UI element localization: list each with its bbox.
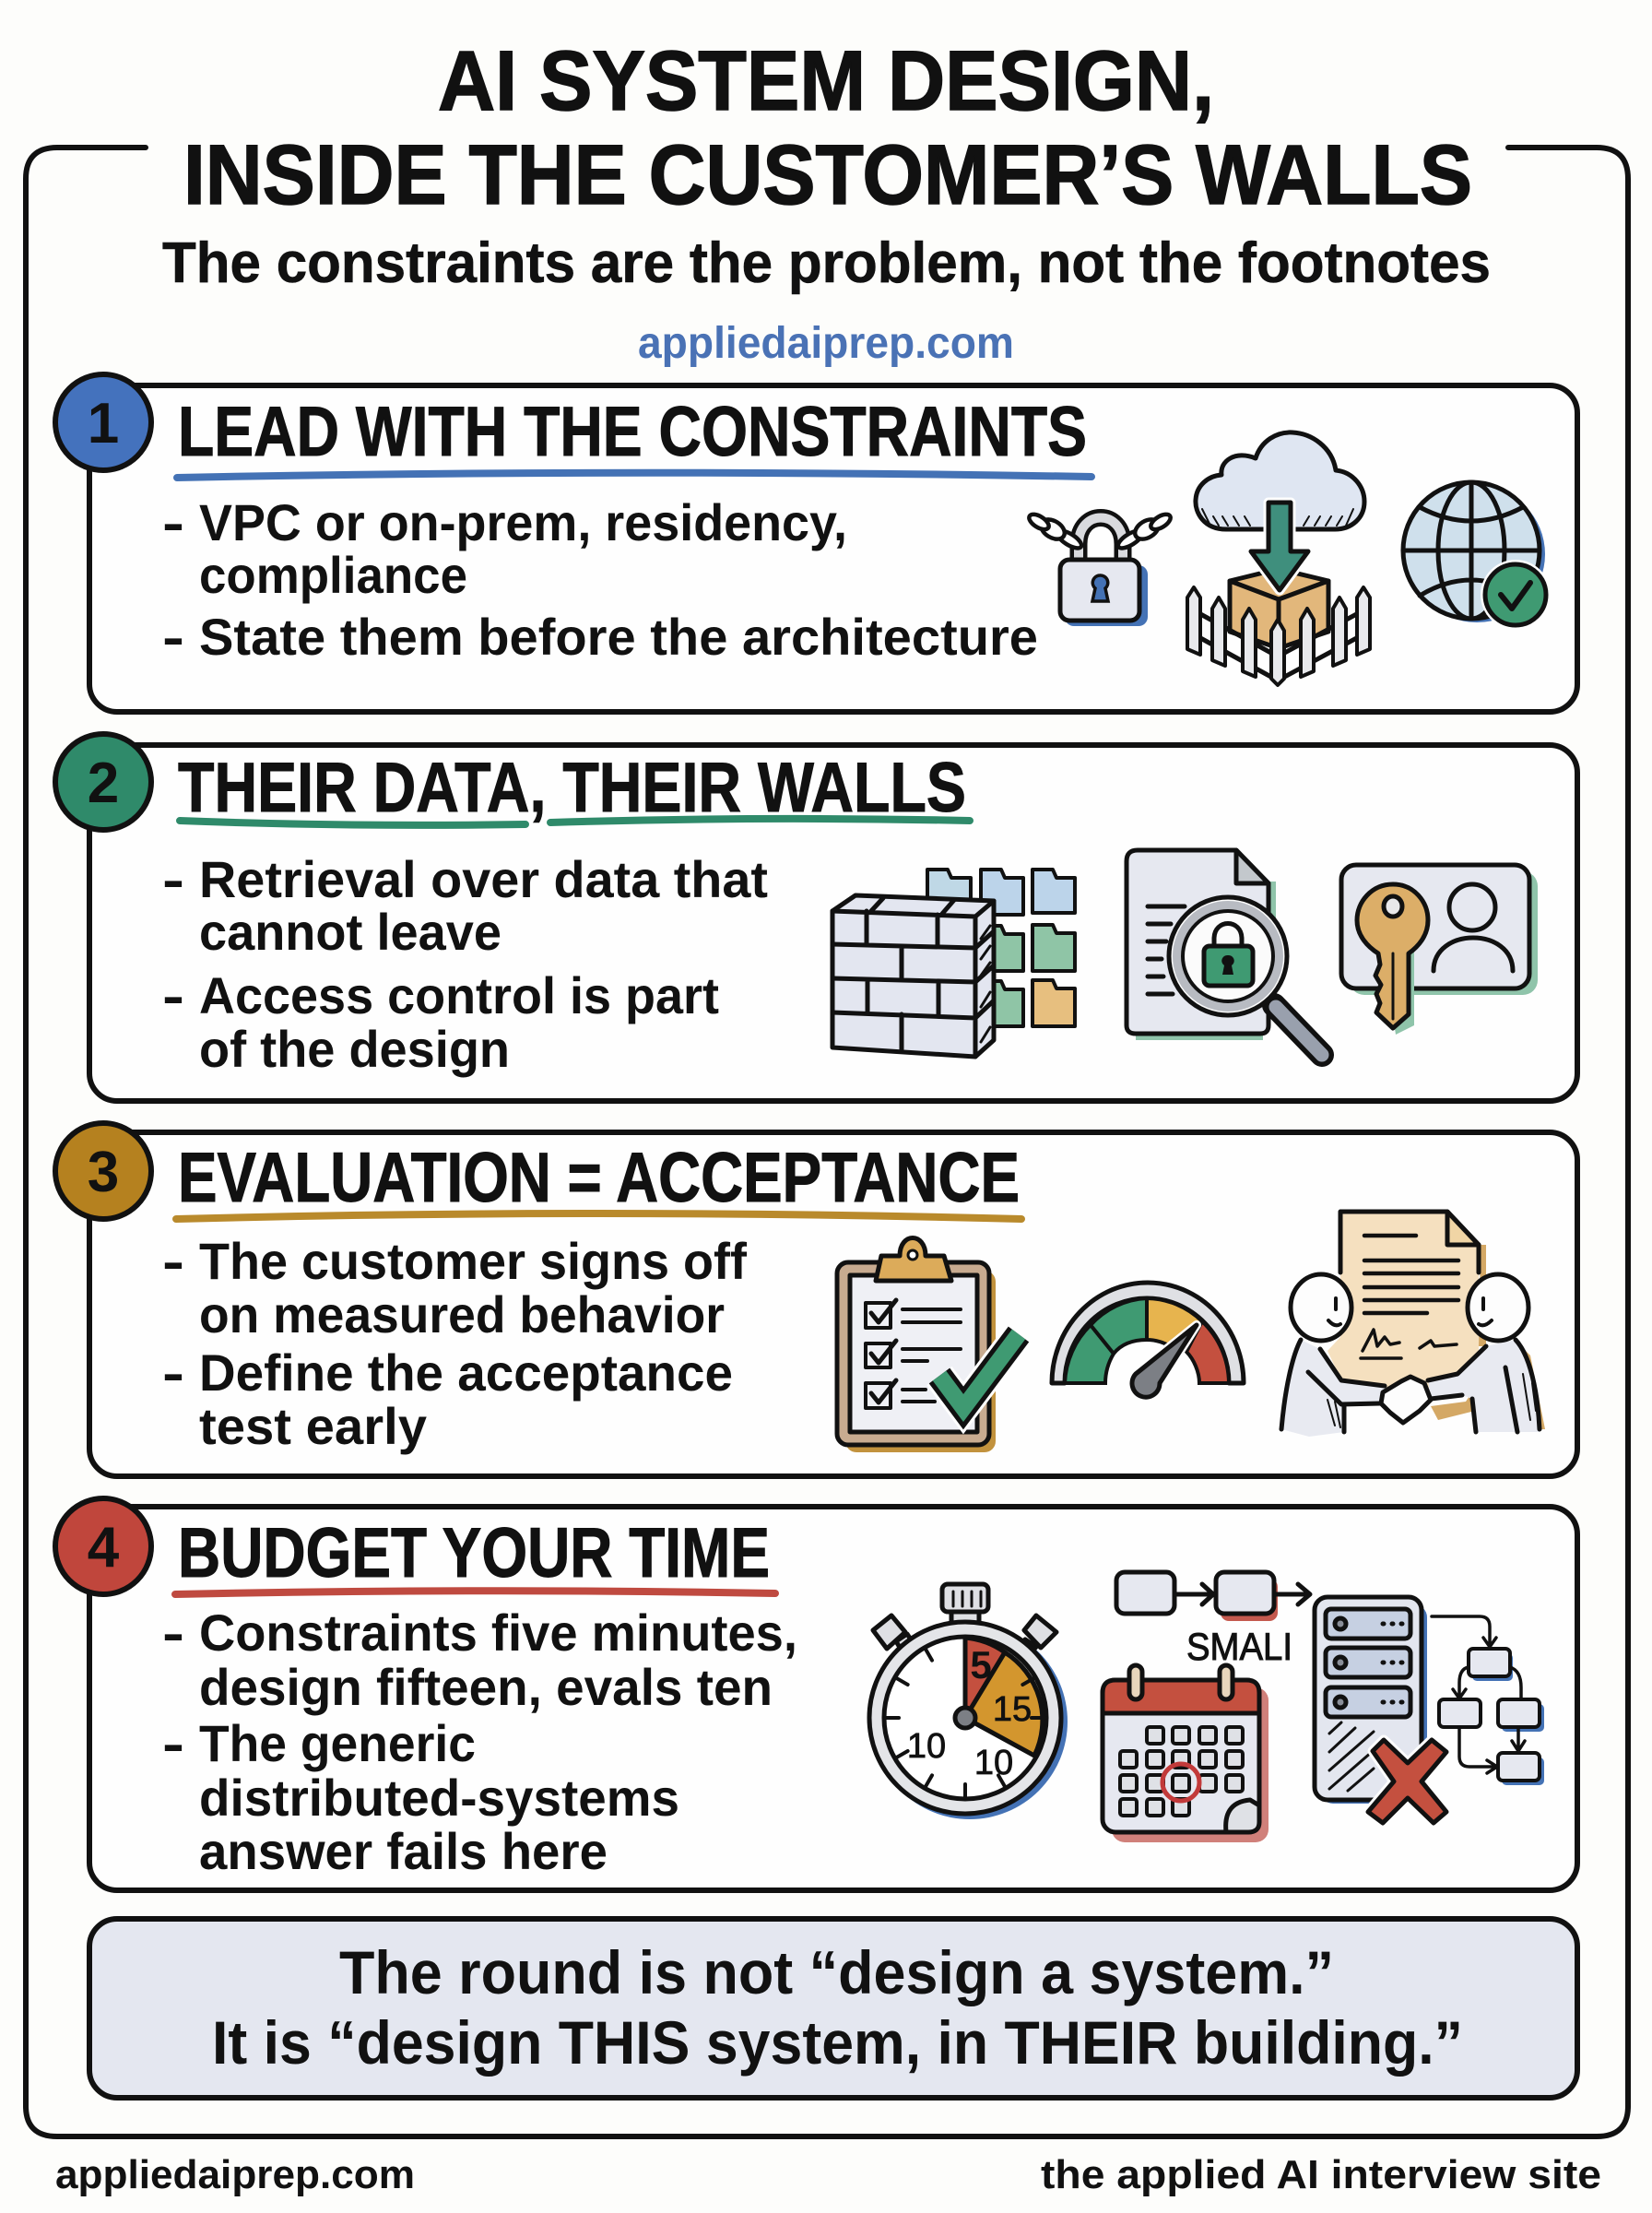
text block 3: on measured behavior bbox=[199, 1285, 725, 1343]
text block 1: VPC or on-prem, residency, bbox=[199, 493, 847, 551]
heading 3: EVALUATION = ACCEPTANCE bbox=[178, 1139, 1020, 1217]
footer left: appliedaiprep.com bbox=[55, 2152, 415, 2197]
text block 4: - bbox=[162, 1604, 184, 1662]
icon: flow diagram bbox=[1432, 1616, 1544, 1785]
text block 1: State them before the architecture bbox=[199, 608, 1038, 666]
icon: calendar bbox=[1103, 1665, 1268, 1842]
title bbox=[183, 34, 1472, 222]
text block 2: Access control is part bbox=[199, 966, 719, 1024]
text block 2: cannot leave bbox=[199, 903, 502, 961]
text block 3 bbox=[162, 1232, 747, 1455]
text block 2: of the design bbox=[199, 1020, 510, 1078]
callout: The round is not “design a system.” bbox=[339, 1938, 1334, 2006]
panel 4: budget your time bbox=[55, 1498, 1577, 1890]
badge 3 bbox=[55, 1123, 151, 1219]
text block 1 bbox=[162, 493, 1038, 666]
badge 3: 3 bbox=[88, 1141, 119, 1204]
icon: globe with check bbox=[1403, 482, 1551, 630]
text block 1: - bbox=[162, 493, 184, 551]
icon: stopwatch: 5 bbox=[970, 1643, 992, 1686]
badge 4: 4 bbox=[88, 1516, 120, 1580]
panel 3: evaluation = acceptance bbox=[55, 1123, 1577, 1476]
text block 4: The generic bbox=[199, 1714, 476, 1772]
icon: server with red x bbox=[1315, 1597, 1446, 1823]
badge 1 bbox=[55, 374, 151, 470]
text block 1: compliance bbox=[199, 546, 467, 604]
text block 4: design fifteen, evals ten bbox=[199, 1658, 773, 1716]
icon: two people signing contract bbox=[1281, 1212, 1545, 1437]
text block 4: distributed-systems bbox=[199, 1769, 679, 1827]
text block 3: - bbox=[162, 1232, 184, 1290]
badge 2 bbox=[55, 734, 151, 830]
text block 3: - bbox=[162, 1343, 184, 1402]
label: small: SMALI bbox=[1186, 1625, 1292, 1668]
site link: appliedaiprep.com bbox=[638, 319, 1014, 368]
icon: stopwatch: 15 bbox=[993, 1690, 1032, 1729]
panel 2: their data, their walls bbox=[55, 734, 1577, 1101]
heading 2: THEIR DATA, THEIR WALLS bbox=[178, 749, 966, 827]
icon: stopwatch: 10 bbox=[907, 1727, 946, 1766]
person right bbox=[1428, 1274, 1540, 1432]
icon: document under magnifier with lock bbox=[1127, 850, 1322, 1055]
text block 4: answer fails here bbox=[199, 1822, 608, 1880]
person left bbox=[1281, 1274, 1385, 1437]
heading 4: BUDGET YOUR TIME bbox=[178, 1514, 770, 1592]
icon: stopwatch: 10 bbox=[974, 1744, 1013, 1782]
panel 1: lead with the constraints bbox=[55, 374, 1577, 712]
title: AI SYSTEM DESIGN, bbox=[438, 34, 1214, 128]
icon: boxes and arrows bbox=[1116, 1572, 1310, 1621]
badge 4 bbox=[55, 1498, 151, 1594]
callout: It is “design THIS system, in THEIR building.” bbox=[212, 2008, 1463, 2077]
text block 4 bbox=[162, 1604, 797, 1880]
text block 2: - bbox=[162, 966, 184, 1024]
title: INSIDE THE CUSTOMER’S WALLS bbox=[183, 128, 1472, 222]
badge 2: 2 bbox=[88, 751, 119, 815]
text block 3: Define the acceptance bbox=[199, 1343, 733, 1402]
underline 4 bbox=[175, 1591, 775, 1594]
icon: cloud to fenced box bbox=[1187, 432, 1370, 685]
text block 3: test early bbox=[199, 1397, 427, 1455]
icon: padlock with chains bbox=[1027, 512, 1173, 626]
underline 2 bbox=[180, 819, 970, 825]
text block 4: Constraints five minutes, bbox=[199, 1604, 797, 1662]
icon: stopwatch bbox=[869, 1584, 1068, 1819]
text block 2: - bbox=[162, 850, 184, 908]
text block 2 bbox=[162, 850, 768, 1078]
heading 1: LEAD WITH THE CONSTRAINTS bbox=[178, 393, 1087, 471]
underline 1 bbox=[177, 473, 1092, 478]
handshake bbox=[1381, 1377, 1431, 1423]
icon: gauge bbox=[1052, 1283, 1244, 1397]
text block 2: Retrieval over data that bbox=[199, 850, 768, 908]
underline 3 bbox=[176, 1213, 1021, 1219]
badge 1: 1 bbox=[88, 392, 119, 456]
subtitle: The constraints are the problem, not the footnotes bbox=[162, 231, 1491, 295]
icon: clipboard checklist bbox=[837, 1237, 1019, 1452]
icon: folders behind brick wall bbox=[832, 870, 1075, 1057]
text block 3: The customer signs off bbox=[199, 1232, 747, 1290]
text block 4: - bbox=[162, 1714, 184, 1772]
footer right: the applied AI interview site bbox=[1041, 2152, 1601, 2197]
callout bbox=[89, 1919, 1577, 2098]
icon: key and user card bbox=[1341, 865, 1538, 1035]
text block 1: - bbox=[162, 608, 184, 666]
